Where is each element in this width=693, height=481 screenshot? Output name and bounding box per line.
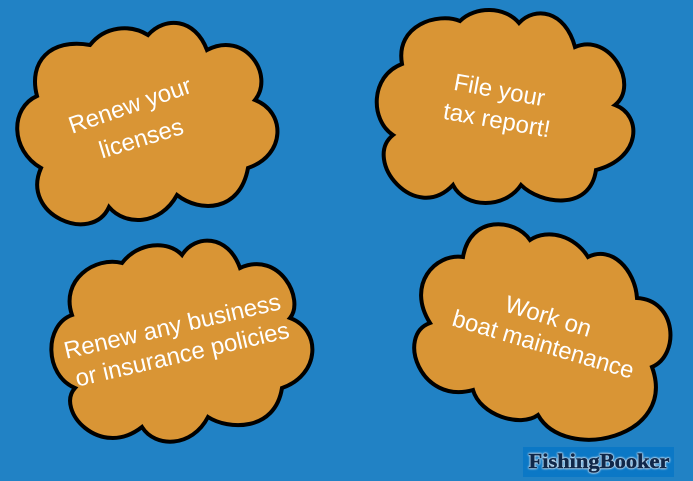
panel: renew policies cloud bbox=[51, 241, 312, 442]
label bbox=[441, 69, 552, 143]
logo: FishingBooker bbox=[523, 447, 674, 477]
panel: file tax report cloud bbox=[377, 10, 633, 203]
label: Work on bbox=[502, 291, 595, 343]
label: or insurance policies bbox=[73, 317, 292, 392]
panel: boat maintenance cloud bbox=[414, 224, 670, 440]
logo: FishingBooker: FishingBooker bbox=[528, 449, 670, 473]
label: Renew your bbox=[65, 72, 195, 140]
label: tax report! bbox=[441, 98, 552, 143]
cloud shape bbox=[377, 10, 633, 203]
label: File your bbox=[452, 69, 547, 112]
label: Renew any business bbox=[61, 289, 283, 365]
cloud shape bbox=[17, 23, 277, 224]
panel: renew licenses cloud bbox=[17, 23, 277, 224]
cloud shape bbox=[414, 224, 670, 440]
cloud shape bbox=[51, 241, 312, 442]
label: licenses bbox=[96, 113, 187, 164]
label: boat maintenance bbox=[449, 305, 637, 384]
